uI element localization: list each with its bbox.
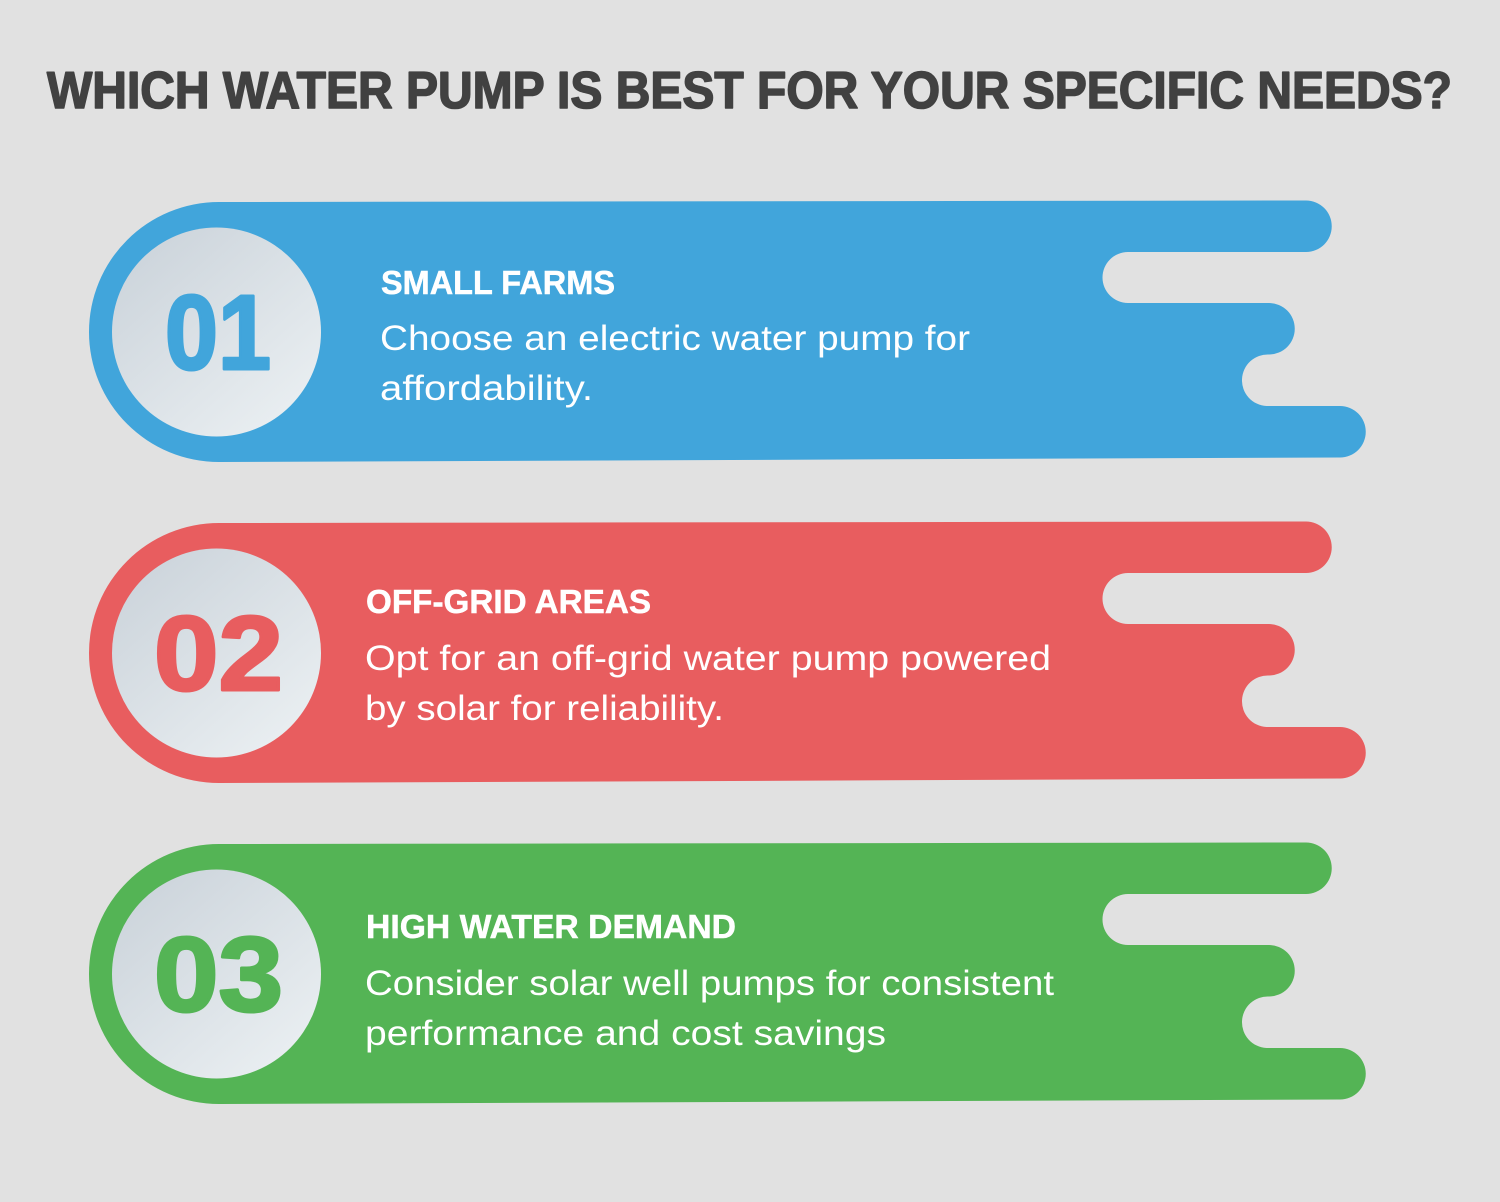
text: off-grid areas description [365,639,1051,728]
number badge 02 [112,548,321,758]
panel shape: green banner [89,842,1366,1104]
text: off-grid areas description: by solar for reliability. [365,689,724,728]
panel: off-grid areas [89,522,1366,783]
text: small farms description: affordability. [380,369,593,408]
panel: small farms [89,200,1366,462]
panel shape: red banner [89,522,1366,783]
text: high water demand description: performance and cost savings [365,1014,886,1053]
text: high water demand description [365,964,1054,1053]
text: small farms description [380,319,970,408]
text: high water demand description: Consider solar well pumps for consistent [365,964,1054,1003]
number badge 02: 02 [154,595,283,713]
number badge 03: 03 [154,916,283,1034]
heading: off-grid areas: OFF-GRID AREAS [366,583,651,620]
panel: high water demand [89,842,1366,1104]
number badge 01 [112,228,321,436]
number badge 01: 01 [165,274,271,392]
heading: high water demand: HIGH WATER DEMAND [366,908,736,945]
heading: small farms: SMALL FARMS [381,264,615,301]
text: off-grid areas description: Opt for an off-grid water pump powered [365,639,1051,678]
number badge 03 [112,870,321,1078]
panel shape: blue banner [89,200,1366,462]
text: small farms description: Choose an electric water pump for [380,319,970,358]
